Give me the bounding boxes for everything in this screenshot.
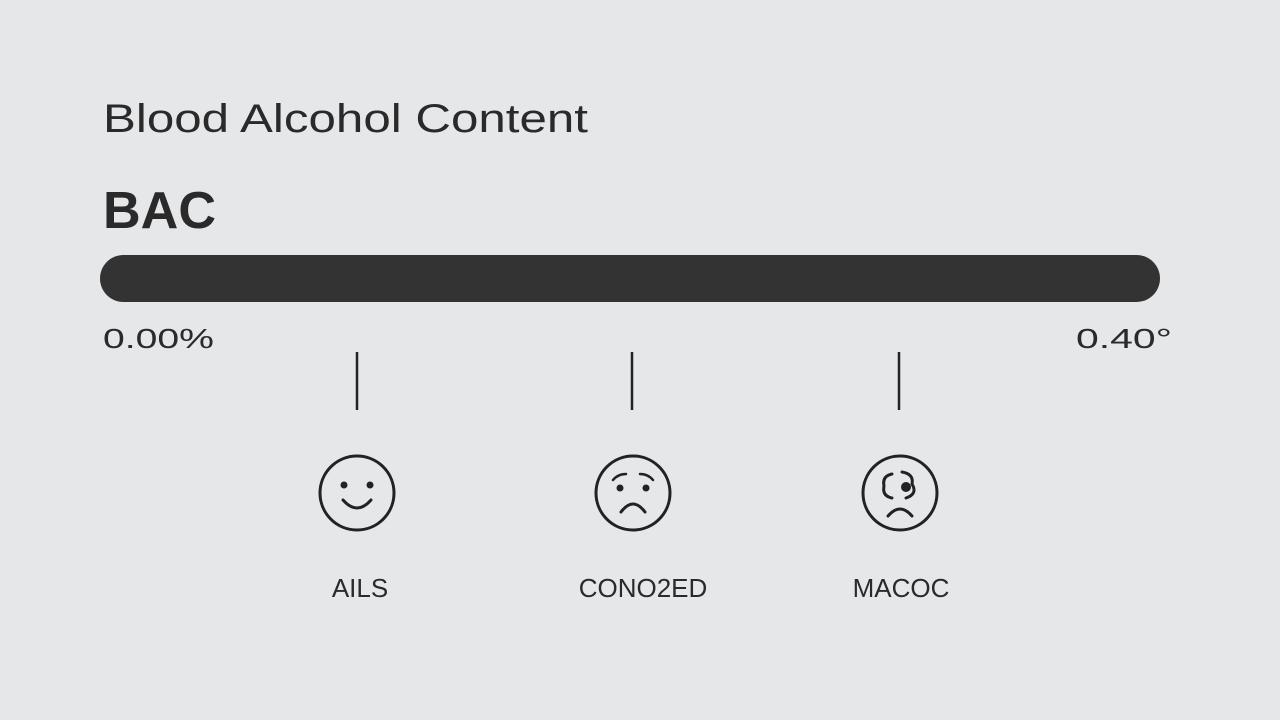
marker: very impaired — [853, 352, 949, 603]
subtitle BAC: BAC — [103, 182, 216, 240]
scale max label: 0.40° — [1076, 323, 1172, 354]
title: Blood Alcohol Content — [103, 97, 588, 141]
bar — [100, 255, 1160, 302]
marker: sad: CONO2ED — [579, 573, 707, 603]
scale min label: 0.00% — [103, 323, 214, 354]
marker: happy — [320, 352, 394, 603]
marker: sad — [579, 352, 707, 603]
marker: very impaired: MACOC — [853, 573, 949, 603]
marker: happy: AILS — [332, 573, 388, 603]
